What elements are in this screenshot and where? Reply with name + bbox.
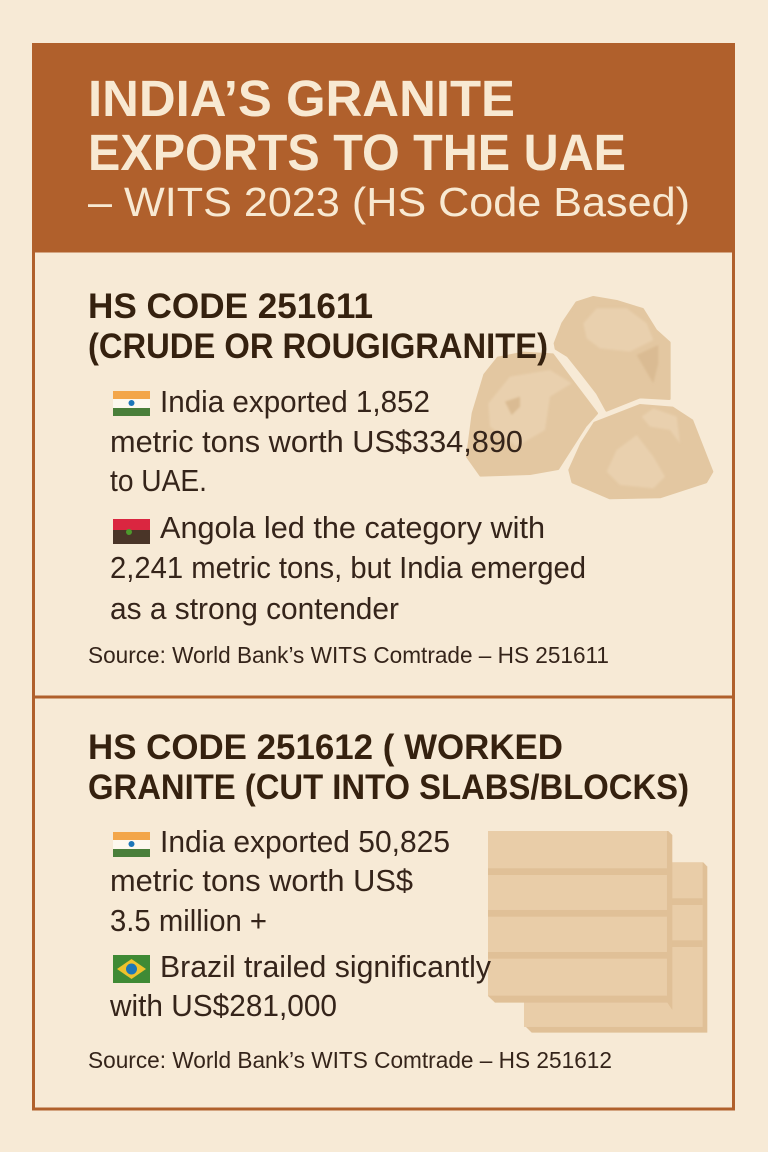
icon: India flag [113,391,150,416]
illustration: granite slabs [488,831,707,1033]
bullet: Brazil: with US$281,000 [109,989,337,1023]
bullet: India exports: metric tons worth US$334,890 [110,425,523,459]
title [88,70,690,225]
bullet: India exports: 3.5 million + [110,904,267,938]
source note: Source: World Bank’s WITS Comtrade – HS 251611 [88,642,609,668]
icon: Brazil flag [113,955,150,983]
bullet: Brazil [109,950,492,1023]
heading: GRANITE (CUT INTO SLABS/BLOCKS) [88,768,689,807]
source note: Source: World Bank’s WITS Comtrade – HS 251612 [88,1047,612,1073]
icon: India flag [113,832,150,857]
bullet: Angola: as a strong contender [110,592,399,626]
icon: Angola flag [113,519,150,544]
heading: HS CODE 251611 [88,287,373,326]
bullet: Angola: Angola led the category with [160,511,545,545]
bullet: India exports: to UAE. [110,464,207,498]
bullet: Brazil: Brazil trailed significantly [160,950,492,984]
heading: HS CODE 251612 ( WORKED [88,728,563,767]
title: – WITS 2023 (HS Code Based) [88,179,690,225]
heading: (CRUDE OR ROUGIGRANITE) [88,327,548,366]
bullet: India exports: India exported 1,852 [160,385,430,419]
bullet: Angola [110,511,586,626]
bullet: India exports: metric tons worth US$ [110,864,413,898]
heading [88,728,689,807]
heading [88,287,548,366]
header banner [32,43,735,251]
title: EXPORTS TO THE UAE [88,124,626,181]
illustration: rough granite rocks [467,297,712,498]
panel: HS code 251612 [34,697,734,1109]
bullet: India exports: India exported 50,825 [160,825,450,859]
panel: HS code 251611 [34,251,734,697]
bullet: India exports [110,385,523,498]
title: INDIA’S GRANITE [88,70,515,127]
bullet: Angola: 2,241 metric tons, but India emerged [110,551,586,585]
bullet: India exports [110,825,450,938]
